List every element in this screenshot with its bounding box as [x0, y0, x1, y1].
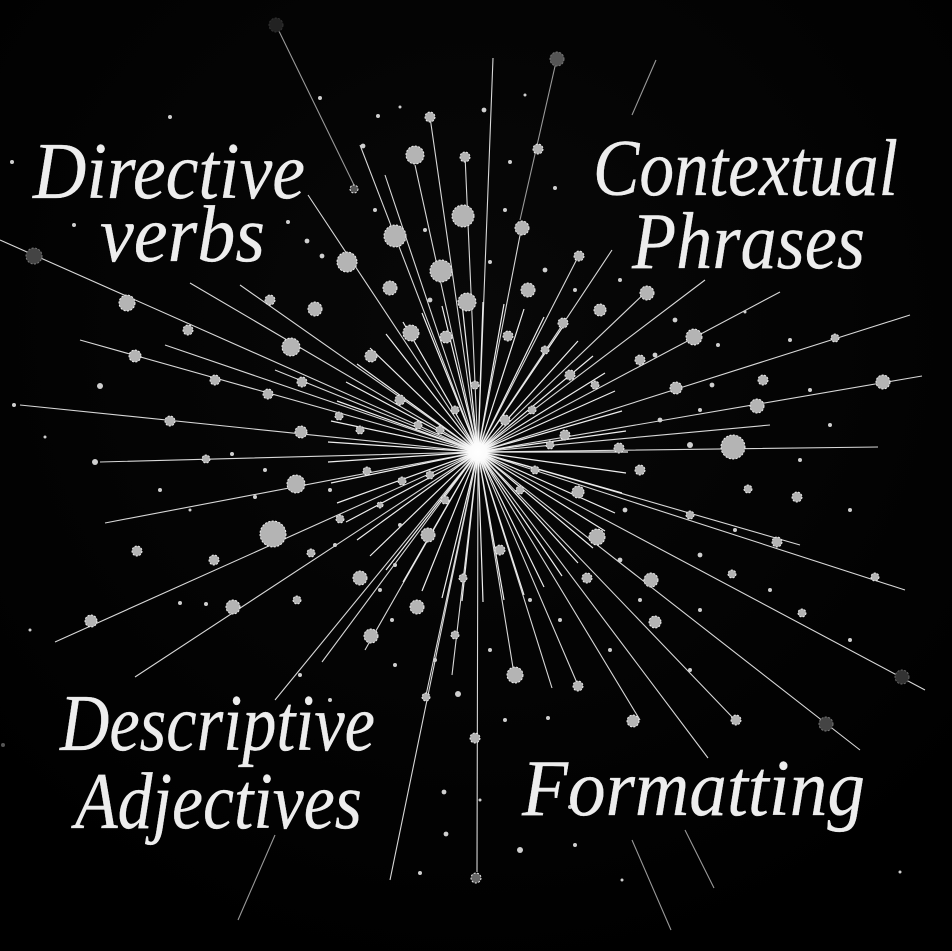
dense inner rays: [328, 302, 628, 602]
heading: Descriptive Adjectives: Descriptive: [59, 680, 375, 768]
heading: Formatting: Formatting: [521, 745, 865, 833]
central burst: [456, 430, 500, 474]
heading: Descriptive Adjectives: Adjectives: [71, 758, 362, 846]
heading: Directive verbs: verbs: [100, 191, 265, 279]
heading: Descriptive Adjectives: [59, 680, 375, 846]
heading: Contextual Phrases: Contextual: [593, 125, 898, 213]
heading: Directive verbs: Directive: [32, 128, 305, 216]
small scattered dots: [1, 94, 902, 882]
heading: Directive verbs: [32, 128, 305, 279]
heading: Contextual Phrases: [593, 125, 898, 286]
heading: Contextual Phrases: Phrases: [631, 198, 865, 286]
